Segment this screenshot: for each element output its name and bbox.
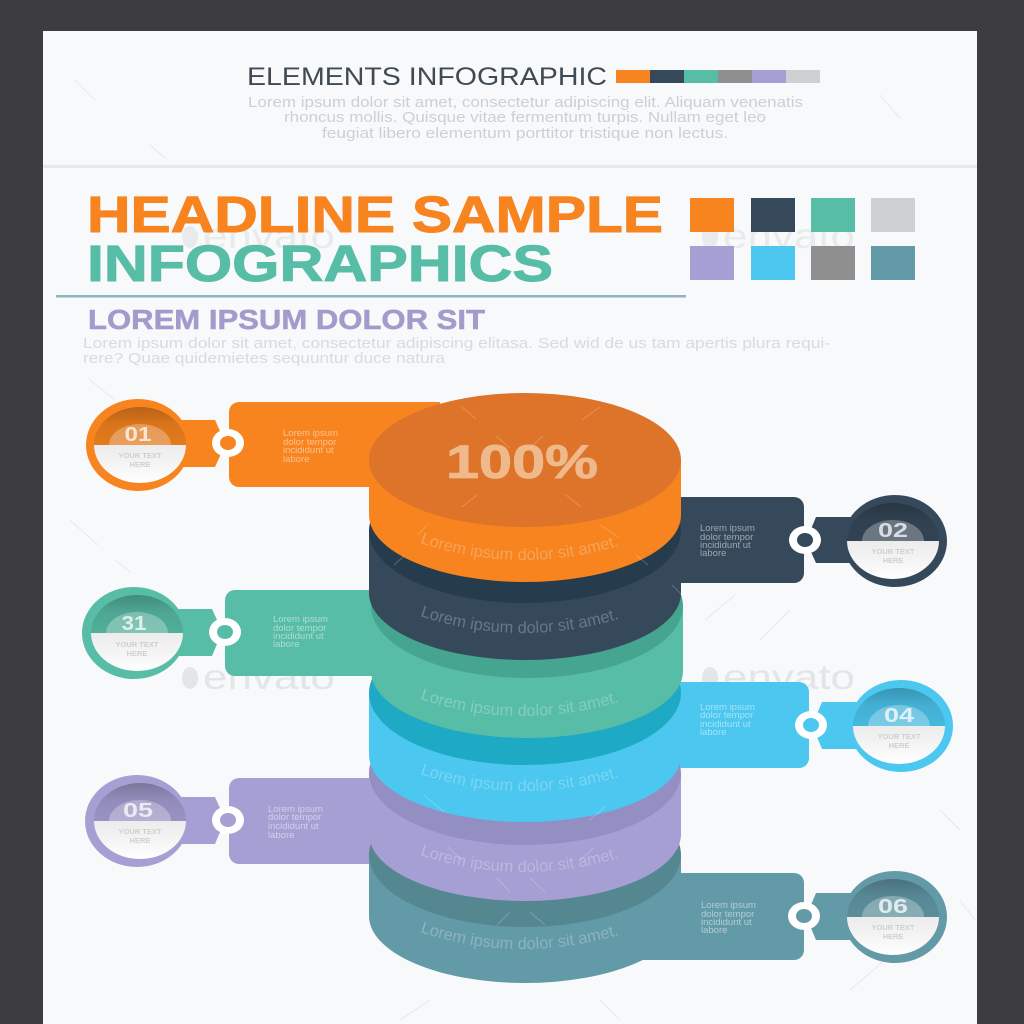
- badge 05: 05: [123, 800, 153, 822]
- tab 05: incididunt ut: [268, 821, 319, 832]
- badge 02: 02: [878, 520, 908, 542]
- layer: steel cylinder: [369, 844, 681, 983]
- layer: orange cylinder: Lorem ipsum dolor sit amet.: [421, 532, 618, 560]
- tab 04: Lorem ipsum: [700, 702, 755, 713]
- watermark: envato: [182, 217, 855, 697]
- layer: blue cylinder: Lorem ipsum dolor sit amet.: [421, 764, 618, 792]
- header text block: [248, 94, 803, 142]
- tab 05: [229, 778, 400, 864]
- layer: purple cylinder: [369, 764, 681, 901]
- headline: HEADLINE SAMPLE: [87, 186, 663, 243]
- badge 02: [789, 495, 947, 587]
- tab 02: labore: [700, 548, 726, 559]
- tab 31: labore: [273, 639, 299, 650]
- badge 04: [795, 680, 953, 772]
- badge 04: HERE: [889, 741, 909, 750]
- badge 04: YOUR TEXT: [878, 732, 921, 741]
- headline: [87, 186, 663, 292]
- badge 01: 01: [125, 424, 151, 446]
- tab 01: [229, 402, 440, 487]
- badge 02: YOUR TEXT: [872, 547, 915, 556]
- intro paragraph: Lorem ipsum dolor sit amet, consectetur adipiscing elitasa. Sed wid de us tam apertis plura requi-: [83, 335, 830, 352]
- tab 01: dolor tempor: [283, 437, 336, 448]
- tab 06: Lorem ipsum: [701, 900, 756, 911]
- tab 04: dolor tempor: [700, 710, 753, 721]
- badge 02: HERE: [883, 556, 903, 565]
- tab 04: incididunt ut: [700, 719, 751, 730]
- layer: orange cylinder: [369, 393, 681, 582]
- subheading: LOREM IPSUM DOLOR SIT: [88, 304, 485, 335]
- tab 01: Lorem ipsum: [283, 428, 338, 439]
- layer: purple cylinder: Lorem ipsum dolor sit amet.: [422, 844, 618, 872]
- layer: orange cylinder: 100%: [446, 435, 598, 488]
- palette swatches: [690, 198, 915, 280]
- badge 31: [82, 587, 241, 679]
- layer: navy cylinder: [369, 522, 681, 660]
- watermark: envato: envato: [723, 217, 855, 256]
- tab 04: labore: [700, 727, 726, 738]
- tab 01: labore: [283, 454, 309, 465]
- header text block: feugiat libero elementum porttitor tristique non lectus.: [322, 125, 728, 142]
- badge 06: [788, 871, 947, 963]
- badge 06: YOUR TEXT: [872, 923, 915, 932]
- layer: teal cylinder: Lorem ipsum dolor sit amet.: [421, 688, 618, 716]
- intro paragraph: [83, 335, 830, 367]
- badge 31: YOUR TEXT: [116, 640, 159, 649]
- tab 31: [225, 590, 400, 676]
- intro paragraph: rere? Quae quidemietes sequuntur duce natura: [83, 350, 446, 367]
- badge 04: 04: [884, 705, 915, 727]
- badge 31: HERE: [127, 649, 147, 658]
- tab 04: [670, 682, 809, 768]
- watermark: envato: envato: [723, 658, 855, 697]
- badge 31: 31: [122, 613, 146, 635]
- badge 01: [86, 399, 244, 491]
- watermark: envato: envato: [203, 658, 335, 697]
- tab 02: dolor tempor: [700, 532, 753, 543]
- tab 05: dolor tempor: [268, 812, 321, 823]
- layer: teal cylinder: [371, 594, 683, 738]
- header text block: Lorem ipsum dolor sit amet, consectetur adipiscing elit. Aliquam venenatis: [248, 94, 803, 111]
- badge 06: 06: [878, 896, 908, 918]
- tab 31: incididunt ut: [273, 631, 324, 642]
- tab 02: incididunt ut: [700, 540, 751, 551]
- badge 05: HERE: [130, 836, 150, 845]
- badge 01: YOUR TEXT: [119, 451, 162, 460]
- tab 02: Lorem ipsum: [700, 523, 755, 534]
- tab 06: dolor tempor: [701, 909, 754, 920]
- layer: blue cylinder: [369, 678, 681, 822]
- tab 06: incididunt ut: [701, 917, 752, 928]
- header text block: rhoncus mollis. Quisque vitae fermentum turpis. Nullam eget leo: [284, 109, 766, 126]
- layer: steel cylinder: Lorem ipsum dolor sit amet.: [421, 922, 618, 950]
- badge 05: YOUR TEXT: [119, 827, 162, 836]
- watermark: envato: envato: [203, 217, 335, 256]
- tab 06: labore: [701, 925, 727, 936]
- header colour strip: [616, 70, 820, 83]
- tab 01: incididunt ut: [283, 445, 334, 456]
- badge 05: [85, 775, 244, 867]
- tab 05: labore: [268, 830, 294, 841]
- tab 31: Lorem ipsum: [273, 614, 328, 625]
- tab 06: [600, 873, 804, 960]
- badge 06: HERE: [883, 932, 903, 941]
- tab 31: dolor tempor: [273, 623, 326, 634]
- header title: ELEMENTS INFOGRAPHIC: [247, 63, 607, 91]
- headline: INFOGRAPHICS: [87, 235, 553, 292]
- tab 05: Lorem ipsum: [268, 804, 323, 815]
- badge 01: HERE: [130, 460, 150, 469]
- layer: navy cylinder: Lorem ipsum dolor sit amet.: [421, 606, 618, 634]
- tab 02: [670, 497, 804, 583]
